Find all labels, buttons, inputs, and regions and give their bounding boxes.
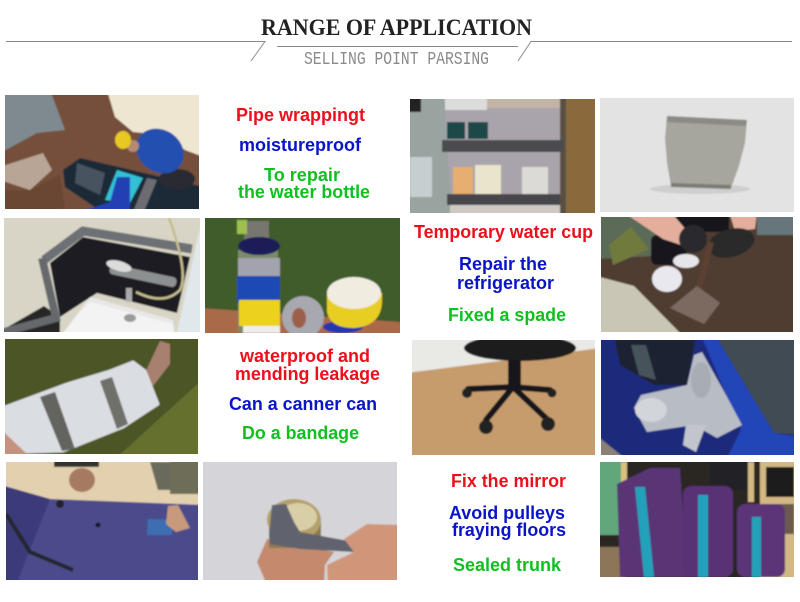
photo: bath taps taped	[4, 218, 200, 332]
photo: office chair on floor	[412, 340, 595, 455]
caption block: mirror, pulleys, trunk: Avoid pulleys	[449, 502, 565, 523]
caption block: mirror, pulleys, trunk: fraying floors	[452, 519, 566, 540]
caption block: mirror, pulleys, trunk: Fix the mirror	[451, 470, 566, 491]
photo: bottle and tape rolls	[205, 218, 400, 333]
photo: inflatable mat repair	[6, 462, 198, 580]
caption block: cup, refrigerator, spade: Repair the	[459, 253, 547, 274]
caption block: pipe, moisture, bottle: To repair	[264, 164, 340, 185]
caption block: pipe, moisture, bottle: the water bottle	[238, 181, 370, 202]
caption block: leakage, can, bandage: Can a canner can	[229, 393, 377, 414]
caption block: pipe, moisture, bottle	[236, 104, 370, 202]
caption block: cup, refrigerator, spade: Temporary water cup	[414, 221, 593, 242]
title: RANGE OF APPLICATION	[261, 15, 532, 41]
caption block: mirror, pulleys, trunk	[449, 470, 566, 575]
subtitle: SELLING POINT PARSING	[304, 50, 489, 70]
caption block: leakage, can, bandage: Do a bandage	[242, 422, 359, 443]
caption block: leakage, can, bandage: mending leakage	[235, 363, 380, 384]
caption block: mirror, pulleys, trunk: Sealed trunk	[453, 554, 562, 575]
photo: taped water cup	[600, 98, 794, 212]
caption block: pipe, moisture, bottle: Pipe wrappingt	[236, 104, 365, 125]
caption block: leakage, can, bandage	[229, 345, 380, 443]
caption block: leakage, can, bandage: waterproof and	[239, 345, 370, 366]
photo: repaired can	[203, 462, 397, 580]
photo: sealed luggage	[600, 462, 794, 577]
photo: fixing a spade	[601, 217, 793, 332]
caption block: cup, refrigerator, spade: Fixed a spade	[448, 304, 566, 325]
caption block: cup, refrigerator, spade	[414, 221, 593, 325]
caption block: cup, refrigerator, spade: refrigerator	[457, 272, 554, 293]
photo: bandaged leg	[5, 339, 198, 454]
photo: car mirror taped	[601, 340, 794, 455]
photo: refrigerator door	[410, 99, 595, 213]
photo: pipe wrapping	[5, 95, 199, 209]
caption block: pipe, moisture, bottle: moistureproof	[239, 134, 362, 155]
